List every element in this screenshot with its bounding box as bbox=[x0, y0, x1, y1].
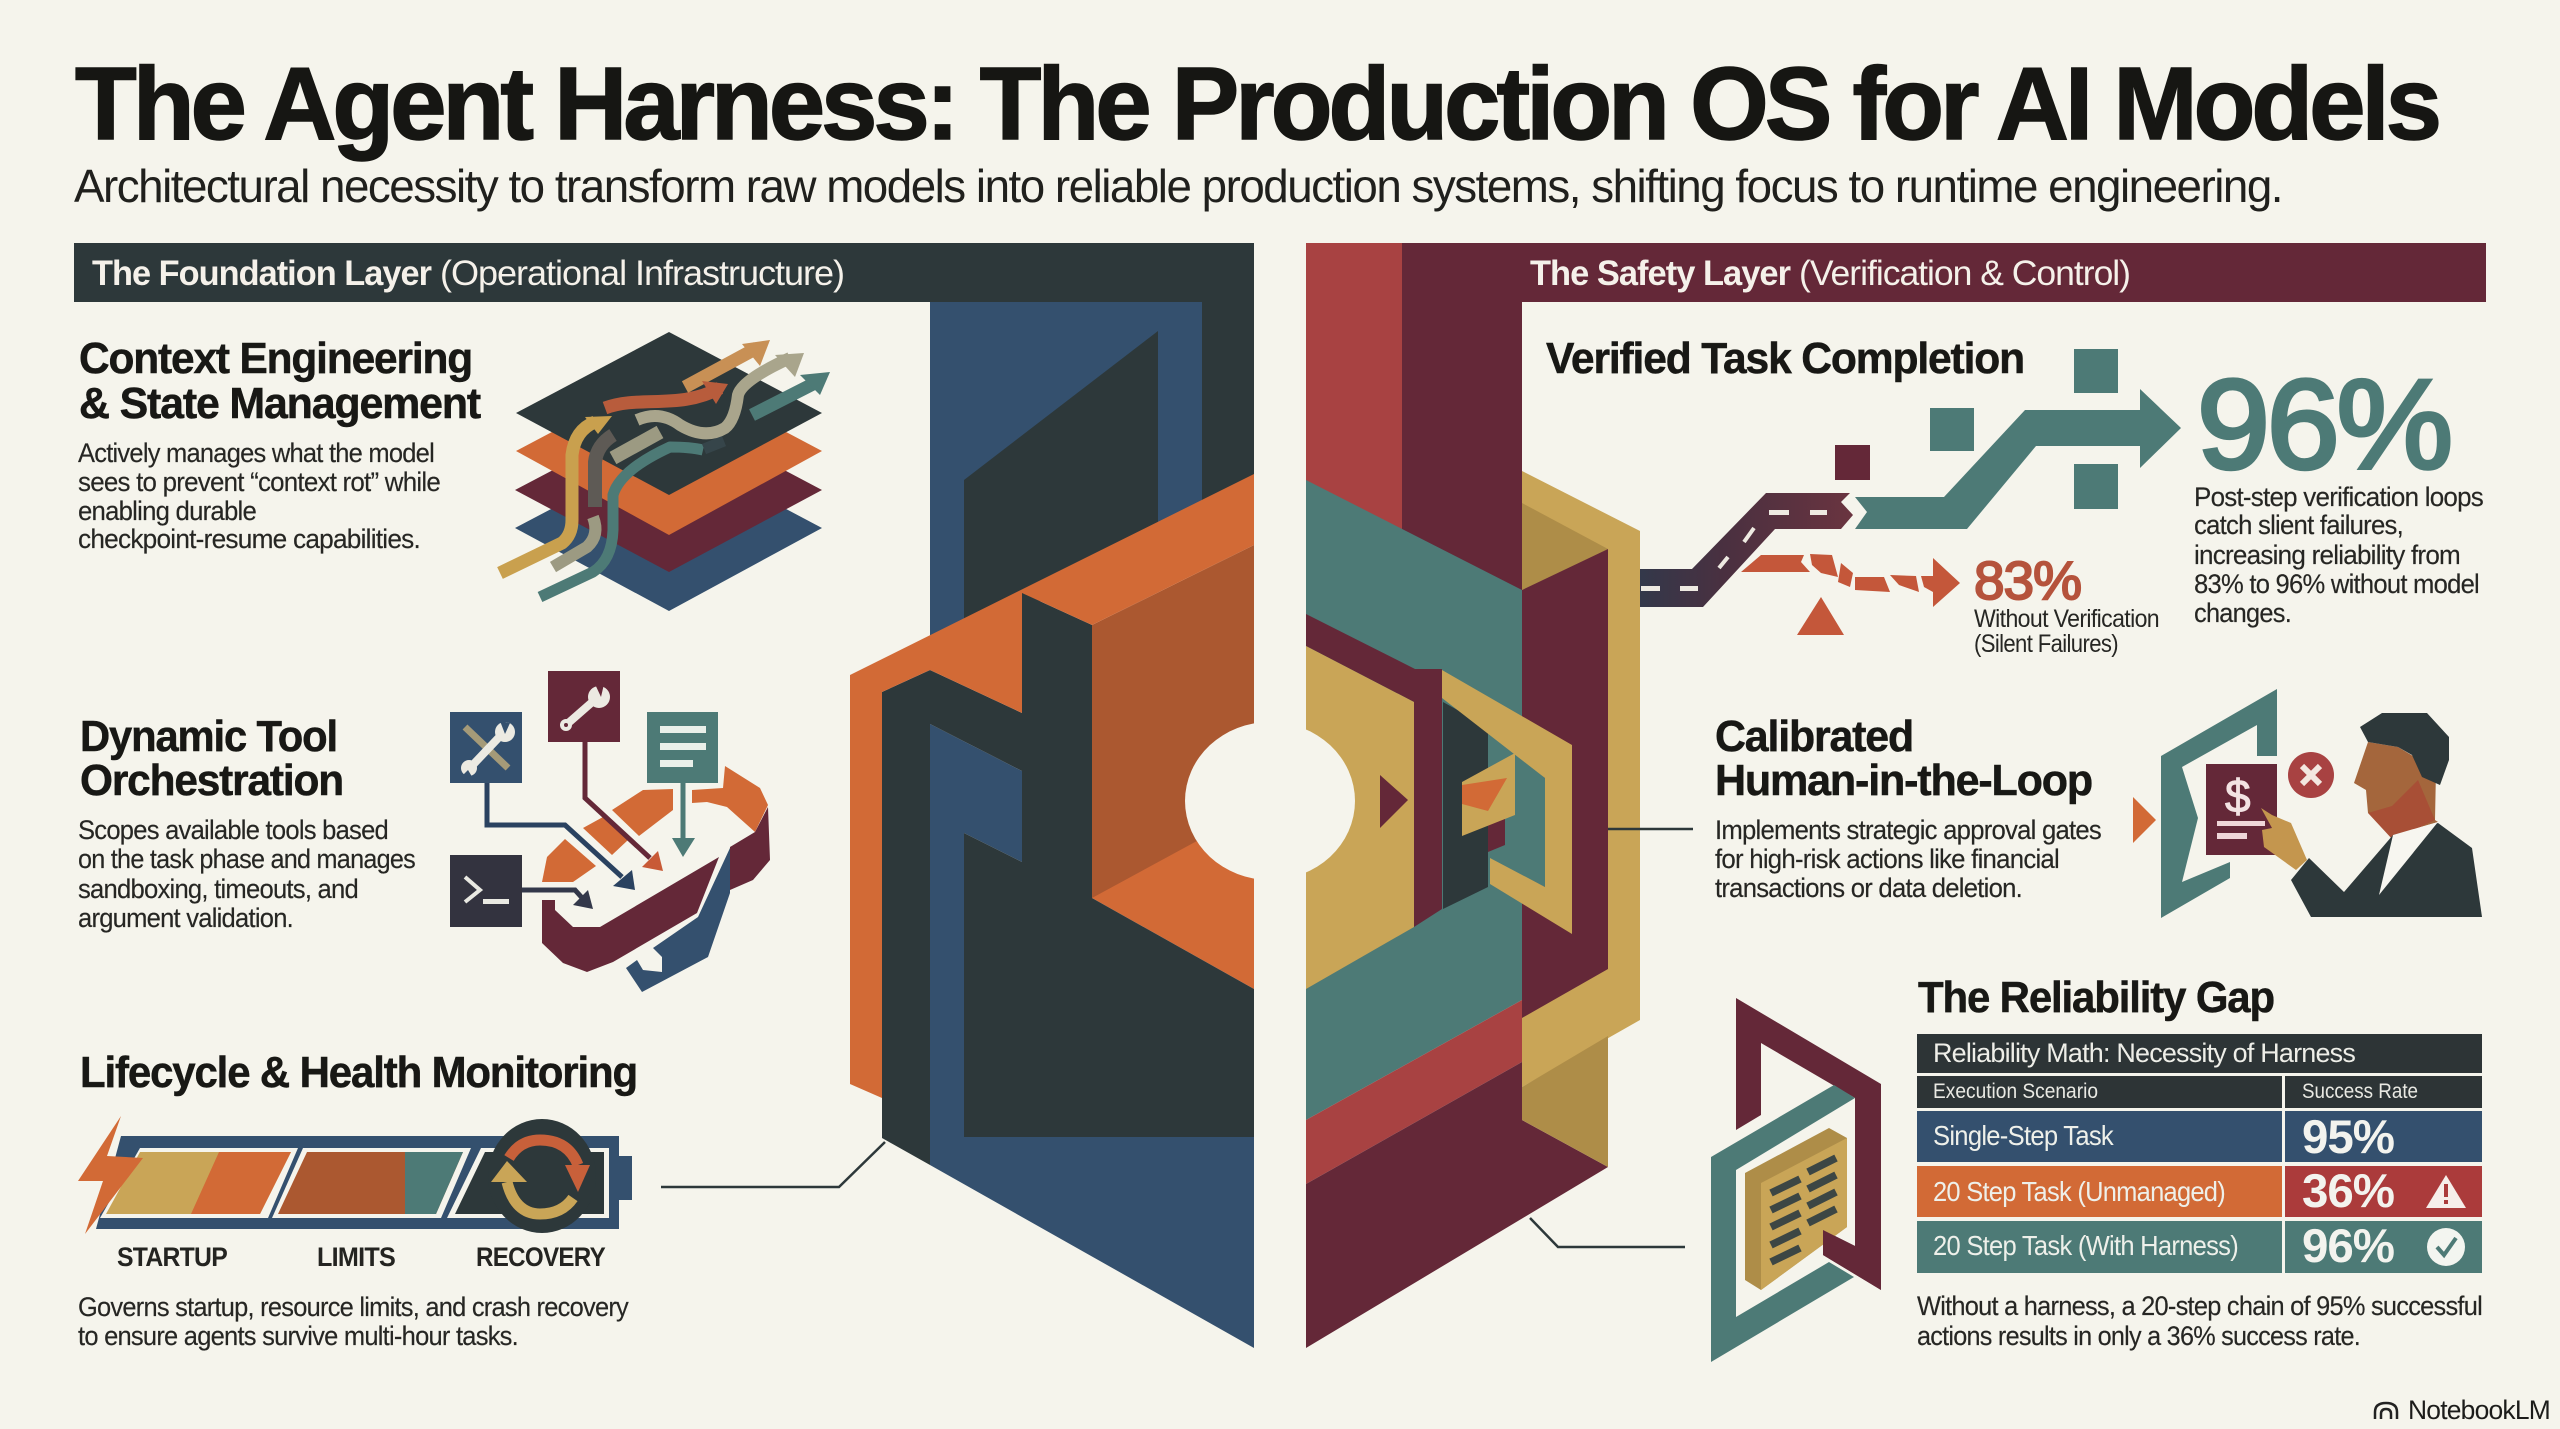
section: dynamic tool orchestration text: Scopes available tools based bbox=[78, 815, 388, 845]
table header row bbox=[1917, 1076, 2482, 1108]
panel: safety layer header bbox=[1306, 243, 2486, 302]
icon: verified document frame bbox=[1711, 998, 1881, 1362]
chart: verification path bbox=[1640, 349, 2181, 635]
row: single-step task: 95% bbox=[2302, 1110, 2394, 1163]
label: without verification: (Silent Failures) bbox=[1974, 630, 2118, 658]
section: dynamic tool orchestration text bbox=[78, 712, 415, 933]
text: verification description: increasing reliability from bbox=[2194, 540, 2460, 570]
text: verification description: 83% to 96% without model bbox=[2194, 569, 2479, 599]
icon: tool orchestration diagram bbox=[450, 671, 770, 992]
battery labels bbox=[117, 1242, 606, 1272]
heading: verified task completion: Verified Task Completion bbox=[1546, 334, 2024, 383]
icon: human approval gate bbox=[2133, 689, 2482, 918]
battery labels: LIMITS bbox=[317, 1242, 395, 1272]
section: human in the loop text: Implements strategic approval gates bbox=[1715, 815, 2101, 845]
warning triangle bbox=[1797, 597, 1844, 635]
panel: safety layer header: The Safety Layer bbox=[1530, 254, 1791, 293]
icon: stacked context layers with arrows bbox=[500, 332, 830, 611]
panel: safety layer header: (Verification & Control) bbox=[1799, 254, 2130, 293]
section: context engineering text: checkpoint-resume capabilities. bbox=[78, 524, 420, 554]
table caption: Without a harness, a 20-step chain of 95% successful bbox=[1917, 1291, 2482, 1321]
section: context engineering text: Actively manages what the model bbox=[78, 438, 434, 468]
central keyhole circle bbox=[1185, 722, 1355, 880]
leader line: human in the loop bbox=[1608, 828, 1693, 830]
panel: foundation layer header: (Operational Infrastructure) bbox=[440, 254, 844, 293]
row: with harness: 96% bbox=[2302, 1219, 2394, 1272]
label: without verification: Without Verification bbox=[1974, 605, 2159, 633]
teal success arrow bbox=[1855, 389, 2181, 529]
approval card: $ bbox=[2225, 770, 2251, 822]
notebooklm logo: NotebookLM bbox=[2408, 1395, 2550, 1425]
heading: the reliability gap: The Reliability Gap bbox=[1918, 973, 2274, 1022]
subtitle: Architectural necessity to transform raw models into reliable production systems, shifting focus to runtime engineering. bbox=[74, 160, 2282, 212]
lifecycle description: to ensure agents survive multi-hour tasks. bbox=[78, 1321, 518, 1351]
section: context engineering text: Context Engineering bbox=[79, 334, 472, 383]
row: with harness bbox=[1917, 1219, 2482, 1273]
row: single-step task bbox=[1917, 1110, 2482, 1163]
row: unmanaged bbox=[1917, 1164, 2482, 1217]
icon: wrench box bbox=[548, 671, 620, 742]
section: human in the loop text: for high-risk actions like financial bbox=[1715, 844, 2059, 874]
text: verification description bbox=[2194, 482, 2483, 628]
section: dynamic tool orchestration text: sandboxing, timeouts, and bbox=[78, 874, 358, 904]
section: context engineering text bbox=[78, 334, 481, 554]
section: human in the loop text: Calibrated bbox=[1715, 712, 1913, 761]
icon: warning bbox=[2426, 1175, 2466, 1208]
stat: 83%: 83% bbox=[1974, 551, 2081, 611]
section: context engineering text: & State Management bbox=[79, 379, 481, 428]
table header row: Execution Scenario bbox=[1933, 1080, 2098, 1103]
icon: lifecycle battery bbox=[78, 1116, 632, 1234]
central harness: right safety half bbox=[1306, 243, 1640, 1348]
table caption: actions results in only a 36% success rate. bbox=[1917, 1321, 2360, 1351]
broken red arrow bbox=[1741, 554, 1960, 607]
lifecycle description bbox=[78, 1292, 629, 1351]
icon: document box bbox=[647, 712, 718, 783]
leader line: reliability bbox=[1530, 1218, 1685, 1247]
section: dynamic tool orchestration text: Orchestration bbox=[80, 756, 343, 805]
person bbox=[2261, 713, 2482, 917]
text: verification description: changes. bbox=[2194, 598, 2291, 628]
icon: lightning bolt bbox=[78, 1116, 143, 1234]
icon: tools box bbox=[450, 712, 522, 783]
road bbox=[1640, 493, 1853, 607]
label: without verification bbox=[1974, 605, 2159, 658]
section: human in the loop text: transactions or data deletion. bbox=[1715, 873, 2022, 903]
text: verification description: catch slient failures, bbox=[2194, 510, 2403, 540]
table title row: Reliability Math: Necessity of Harness bbox=[1933, 1038, 2355, 1068]
section: context engineering text: enabling durable bbox=[78, 496, 256, 526]
section: human in the loop text bbox=[1715, 712, 2101, 903]
panel: foundation layer header: The Foundation Layer bbox=[92, 254, 432, 293]
section: human in the loop text: Human-in-the-Loop bbox=[1715, 756, 2092, 805]
battery labels: STARTUP bbox=[117, 1242, 228, 1272]
row: unmanaged: 20 Step Task (Unmanaged) bbox=[1933, 1176, 2225, 1207]
table header row: Success Rate bbox=[2302, 1080, 2418, 1103]
battery labels: RECOVERY bbox=[476, 1242, 606, 1272]
text: verification description: Post-step verification loops bbox=[2194, 482, 2483, 512]
row: with harness: 20 Step Task (With Harness) bbox=[1933, 1230, 2238, 1261]
leader line: foundation bbox=[661, 1142, 885, 1187]
approval card bbox=[2206, 764, 2277, 855]
lifecycle description: Governs startup, resource limits, and crash recovery bbox=[78, 1292, 629, 1322]
central split gap bbox=[1254, 243, 1306, 1363]
table caption bbox=[1917, 1291, 2482, 1351]
verification steps squares bbox=[1835, 349, 2118, 509]
row: single-step task: Single-Step Task bbox=[1933, 1120, 2115, 1151]
section: dynamic tool orchestration text: Dynamic Tool bbox=[80, 712, 337, 761]
row: unmanaged: 36% bbox=[2302, 1164, 2394, 1217]
central harness: left foundation half bbox=[850, 302, 1254, 1348]
panel: foundation layer header bbox=[74, 243, 1254, 302]
reject button bbox=[2288, 752, 2334, 798]
section: dynamic tool orchestration text: on the task phase and manages bbox=[78, 844, 415, 874]
section: dynamic tool orchestration text: argument validation. bbox=[78, 903, 293, 933]
section: context engineering text: sees to prevent “context rot” while bbox=[78, 467, 440, 497]
table title row bbox=[1917, 1034, 2482, 1073]
icon: recovery cycle bbox=[488, 1119, 596, 1233]
table: reliability math bbox=[1917, 1034, 2482, 1273]
icon: terminal box bbox=[450, 855, 522, 927]
section: lifecycle heading: Lifecycle & Health Monitoring bbox=[80, 1048, 637, 1097]
icon: check bbox=[2427, 1228, 2465, 1266]
title: The Agent Harness: The Production OS for AI Models bbox=[75, 46, 2439, 161]
stat: 96%: 96% bbox=[2197, 353, 2450, 495]
